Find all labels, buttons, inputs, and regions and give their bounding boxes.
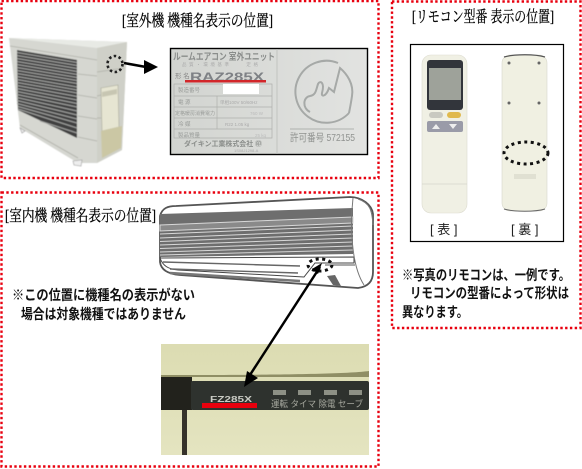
callout: remote model position — [504, 142, 548, 164]
heading: outdoor unit: [室外機 機種名表示の位置] — [122, 12, 273, 30]
photo: nameplate: 冷 媒 — [178, 120, 191, 128]
photo: nameplate: 形 名 — [175, 71, 190, 80]
callout: indoor label position — [308, 259, 332, 271]
photo: nameplate: 定格暖房消費電力 — [175, 110, 215, 117]
photo: nameplate: ルームエアコン 室外ユニット — [173, 51, 275, 63]
photo: indoor display panel: FZ285X — [210, 395, 253, 404]
label: back: [ 裏 ] — [511, 222, 538, 237]
panel: indoor unit — [2, 192, 378, 466]
note: indoor unit: ※この位置に機種名の表示がない — [12, 287, 195, 303]
note: indoor unit: 場合は対象機種ではありません — [21, 306, 186, 322]
note: remote control: 異なります。 — [402, 304, 468, 320]
photo: nameplate: 許可番号 572155 — [290, 131, 355, 144]
photo: nameplate — [170, 48, 368, 154]
panel: remote control — [392, 2, 580, 328]
note: indoor unit — [12, 287, 195, 322]
heading: indoor unit: [室内機 機種名表示の位置] — [5, 207, 156, 225]
note: remote control — [402, 267, 570, 320]
photo: outdoor unit — [9, 38, 127, 166]
photo frame: remote control — [410, 44, 564, 242]
arrow: outdoor unit to label — [124, 60, 158, 74]
remote back — [502, 55, 547, 211]
photo: nameplate: 25 kg — [255, 133, 267, 138]
photo: nameplate: 760 W — [250, 111, 264, 116]
photo: indoor display panel — [161, 344, 369, 455]
photo: indoor display panel: 運転 タイマ 除電 セーブ — [271, 398, 363, 409]
label: front: [ 表 ] — [430, 222, 457, 237]
photo: nameplate: ダイキン工業株式会社 ㊞ — [184, 139, 262, 148]
callout: outdoor label position — [108, 56, 122, 72]
photo: nameplate: 製造番号 — [178, 86, 201, 94]
photo: nameplate: 電 源 — [178, 98, 191, 106]
photo: nameplate: 製品質量 — [178, 131, 201, 139]
drawing: indoor unit — [160, 197, 373, 288]
panel: outdoor unit — [2, 1, 378, 178]
photo: nameplate: 品質・環境基準 定格 — [182, 61, 258, 68]
remote front — [422, 55, 467, 213]
photo: nameplate: RAZ285X — [190, 70, 264, 84]
photo: nameplate: 単相100V 50/60Hz — [220, 99, 258, 106]
photo: nameplate: 1S08J1298-A — [234, 148, 259, 153]
photo: nameplate: R22 1.05 kg — [225, 122, 250, 127]
arrow: indoor unit to display panel — [244, 263, 322, 387]
